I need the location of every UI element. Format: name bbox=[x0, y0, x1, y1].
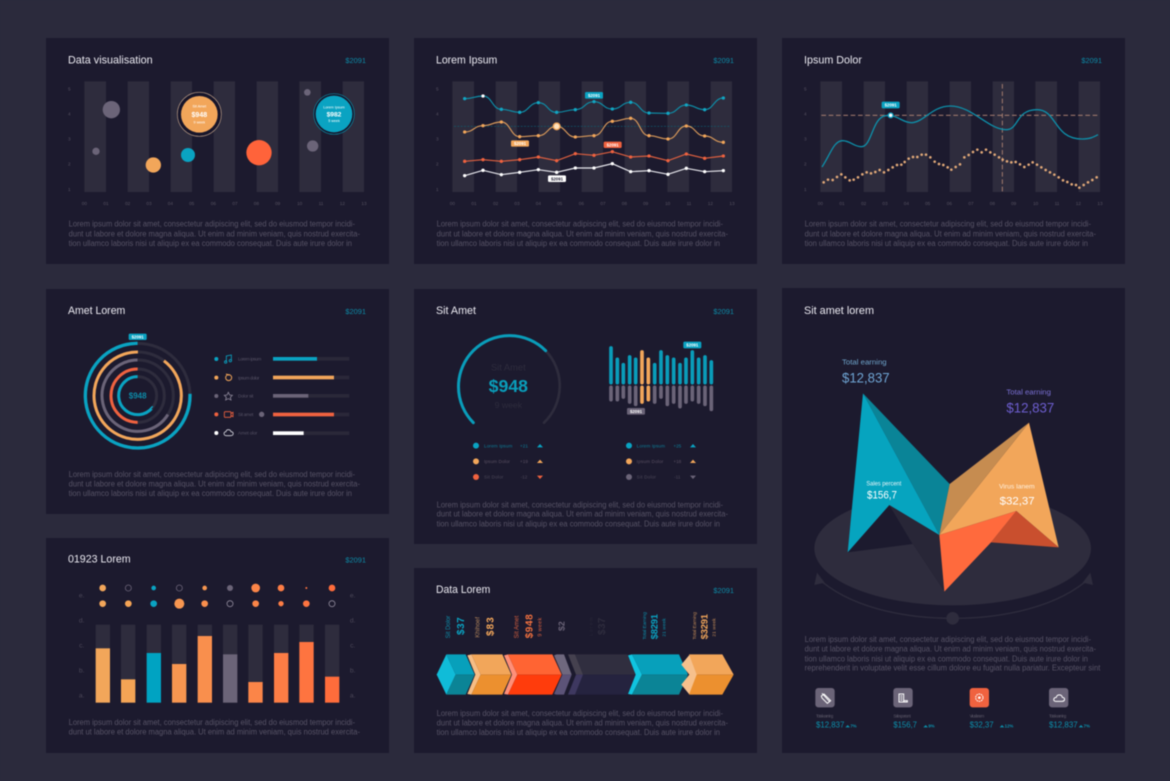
tag: orange: $2091 bbox=[514, 141, 527, 146]
legend left: Sit Dolor bbox=[484, 475, 504, 480]
line chart: 01 bbox=[471, 201, 477, 206]
panel: data lorem arrow chain bbox=[414, 568, 757, 753]
label: virus lanem: Virus lanem bbox=[999, 484, 1035, 491]
price label: $2091 bbox=[713, 586, 734, 595]
body text: dunt ut labore et dolore magna aliqua. Ut enim ad minim veniam, quis nostrud exercita- bbox=[437, 718, 728, 727]
legend right: Lorem Ipsum bbox=[637, 443, 665, 448]
bubble chart: 4 bbox=[68, 112, 71, 117]
line chart: 02 bbox=[493, 201, 499, 206]
body text bbox=[805, 220, 1096, 248]
bubble chart bbox=[68, 81, 367, 206]
price label: $2091 bbox=[345, 556, 366, 565]
stat: virus lanem: Virus lanem bbox=[970, 713, 985, 718]
bubble chart: 00 bbox=[82, 201, 87, 206]
body text: dunt ut labore et dolore magna aliqua. Ut enim ad minim veniam, quis nostrud exercita- bbox=[805, 645, 1096, 654]
stat: virus lanem: 12% bbox=[1005, 723, 1013, 728]
label: total earning left: Total earning bbox=[842, 358, 887, 367]
tag: gray: $2091 bbox=[630, 409, 643, 414]
radial chart bbox=[77, 335, 199, 457]
stat: total earning one: Total earning bbox=[816, 713, 834, 718]
legend left: +21 bbox=[520, 443, 528, 448]
body text: Lorem ipsum dolor sit amet, consectetur adipiscing elit, sed do eiusmod tempor incidi- bbox=[437, 220, 723, 229]
block: teal cube bbox=[437, 654, 475, 695]
block: red bbox=[504, 654, 562, 695]
stat: total earning one: $12,837 bbox=[816, 720, 845, 730]
axis letters: c. bbox=[79, 643, 84, 650]
3D chart bbox=[814, 358, 1093, 625]
curve and dotted chart: 00 bbox=[818, 201, 823, 206]
block: dark long bbox=[575, 654, 636, 695]
label: virus lanem bbox=[999, 484, 1035, 508]
axis letters: b. bbox=[350, 667, 356, 674]
label: sales percent: $156,7 bbox=[867, 490, 897, 502]
legend row: cloud: Amet olor bbox=[238, 431, 258, 436]
body text: Lorem ipsum dolor sit amet, consectetur adipiscing elit, sed do eiusmod tempor incidi- bbox=[69, 470, 355, 479]
body text: dunt ut labore et dolore magna aliqua. Ut enim ad minim veniam, quis nostrud exercita- bbox=[437, 510, 728, 519]
gauge bbox=[458, 336, 560, 423]
bubble chart: 06 bbox=[211, 201, 216, 206]
tag: teal: $2091 bbox=[132, 334, 144, 339]
heading: 01923 Lorem bbox=[68, 554, 131, 566]
legend right: Sit Dolor bbox=[637, 475, 656, 480]
label: total earning right bbox=[1006, 387, 1054, 416]
stat: total earning two bbox=[1049, 688, 1090, 730]
vertical labels: Sit Amet bbox=[515, 615, 521, 638]
legend row: star: Dolor sit bbox=[238, 394, 254, 399]
price label: $2091 bbox=[345, 307, 366, 316]
callout: teal bubble: 5 week bbox=[328, 119, 340, 123]
vertical labels: $3291 bbox=[699, 614, 709, 639]
body text: tion ullamco laboris nisi ut aliquip ex ea commodo consequat. Duis aute irure dolor in bbox=[69, 239, 352, 248]
callout: orange bubble: $948 bbox=[192, 112, 207, 119]
line chart: 00 bbox=[450, 201, 455, 206]
vertical labels: Lorem bbox=[588, 617, 593, 636]
bubble chart: 12 bbox=[340, 201, 345, 206]
footer content bbox=[805, 635, 1101, 730]
body text: dunt ut labore et dolore magna aliqua. Ut enim ad minim veniam, quis nostrud exercita- bbox=[69, 727, 360, 736]
bubble chart: 09 bbox=[275, 201, 281, 206]
legend right: +18 bbox=[673, 459, 682, 464]
line chart: 08 bbox=[622, 201, 627, 206]
tag: white: $2091 bbox=[551, 176, 564, 181]
vertical labels: $37 bbox=[597, 617, 608, 635]
price label: $2091 bbox=[1081, 56, 1102, 65]
tag: red bbox=[604, 142, 622, 148]
body text bbox=[69, 718, 360, 736]
tag: gray bbox=[627, 408, 645, 415]
line chart: 06 bbox=[579, 201, 584, 206]
curve and dotted chart: 2 bbox=[804, 162, 807, 167]
curve and dotted chart: 02 bbox=[861, 201, 867, 206]
vertical labels: Sit Dolor bbox=[446, 616, 452, 638]
vertical labels: $37 bbox=[456, 617, 467, 635]
label: virus lanem: $32,37 bbox=[1000, 496, 1035, 508]
legend bars bbox=[214, 355, 349, 436]
heading: Sit Amet bbox=[436, 305, 476, 317]
curve and dotted chart: 11 bbox=[1055, 201, 1060, 206]
line chart: 12 bbox=[708, 201, 713, 206]
vertical labels: $8291 bbox=[649, 614, 659, 639]
tag: teal: $2091 bbox=[588, 93, 601, 98]
tag: teal: $2091 bbox=[885, 103, 897, 108]
axis letters: d. bbox=[79, 617, 85, 624]
body text: tion ullamco laboris nisi ut aliquip ex ea commodo consequat. Duis aute irure dolor in bbox=[437, 519, 720, 528]
line chart: 1 bbox=[436, 187, 439, 192]
line chart: 5 bbox=[436, 87, 439, 92]
legend right bbox=[626, 443, 696, 480]
arrow chain bbox=[437, 654, 734, 695]
heading: Sit amet lorem bbox=[804, 305, 874, 317]
price label: $2091 bbox=[345, 56, 366, 65]
tag: teal bbox=[882, 102, 900, 108]
line chart: 2 bbox=[436, 162, 439, 167]
axis letters bbox=[79, 592, 356, 700]
body text: Lorem ipsum dolor sit amet, consectetur adipiscing elit, sed do eiusmod tempor incidi- bbox=[437, 500, 723, 509]
bubble chart: 02 bbox=[125, 201, 131, 206]
curve and dotted chart: 1 bbox=[804, 187, 807, 192]
dot matrix bbox=[99, 584, 335, 609]
teal peak bbox=[848, 393, 950, 552]
bubble chart: 07 bbox=[232, 201, 238, 206]
label: total earning left bbox=[842, 358, 890, 386]
legend row: swirl: Ipsum dolor bbox=[238, 375, 260, 380]
legend left bbox=[473, 443, 543, 480]
line chart: 05 bbox=[557, 201, 563, 206]
gauge: Sit Amet bbox=[491, 363, 526, 373]
block: orange end bbox=[681, 654, 734, 695]
tag: orange bbox=[511, 140, 529, 147]
heading: Amet Lorem bbox=[68, 305, 125, 317]
bubble chart: 04 bbox=[168, 201, 173, 206]
callout: orange bubble bbox=[177, 92, 221, 136]
price label: $2091 bbox=[713, 56, 734, 65]
body text: dunt ut labore et dolore magna aliqua. Ut enim ad minim veniam, quis nostrud exercita- bbox=[805, 229, 1096, 238]
legend right: Ipsum Dolor bbox=[637, 459, 664, 464]
body text bbox=[437, 709, 728, 737]
block: orange bbox=[467, 654, 511, 695]
curve and dotted chart: 3 bbox=[804, 137, 807, 142]
curve and dotted chart bbox=[804, 81, 1103, 206]
callout: teal bubble: Lorem Ipsum bbox=[323, 106, 345, 110]
vertical labels: $2 bbox=[556, 621, 566, 631]
vertical labels: Total Earning bbox=[642, 612, 648, 640]
bubble chart: 13 bbox=[361, 201, 367, 206]
orange peak bbox=[939, 423, 1059, 547]
price label: $2091 bbox=[713, 307, 734, 316]
legend row: music: Lorem ipsum bbox=[238, 357, 261, 362]
vertical labels: 21 week bbox=[662, 618, 667, 637]
legend row: video: Sit amet bbox=[238, 412, 254, 417]
curve and dotted chart: 05 bbox=[925, 201, 931, 206]
body text: Lorem ipsum dolor sit amet, consectetur adipiscing elit, sed do eiusmod tempor incidi- bbox=[437, 709, 723, 718]
bubble chart: 03 bbox=[146, 201, 152, 206]
line chart: 4 bbox=[436, 112, 439, 117]
axis letters: e. bbox=[79, 592, 85, 599]
block: gray small back bbox=[568, 654, 583, 695]
stat: total earning two: Total earning bbox=[1049, 713, 1067, 718]
stat: total earning two: $12,837 bbox=[1049, 720, 1078, 730]
stat: sales percent: Sales percent bbox=[893, 713, 911, 718]
bubble chart: 2 bbox=[68, 162, 71, 167]
curve and dotted chart: 08 bbox=[990, 201, 995, 206]
bubble chart: 1 bbox=[68, 187, 71, 192]
line chart: 13 bbox=[729, 201, 735, 206]
curve and dotted chart: 03 bbox=[882, 201, 888, 206]
line chart: 09 bbox=[643, 201, 649, 206]
heading: Lorem Ipsum bbox=[436, 55, 497, 67]
body text: tion ullamco laboris nisi ut aliquip ex ea commodo consequat. Duis aute irure dolor in bbox=[805, 239, 1088, 248]
axis letters: b. bbox=[79, 667, 85, 674]
tag: white bbox=[548, 175, 566, 182]
legend right: +25 bbox=[673, 443, 682, 448]
callout: orange bubble: Sit Amet bbox=[193, 104, 206, 108]
callout: teal bubble: $982 bbox=[327, 112, 342, 119]
axis letters: d. bbox=[350, 617, 356, 624]
shadow shapes bbox=[848, 505, 944, 592]
block: gray bbox=[554, 654, 572, 695]
bubble chart: 3 bbox=[68, 137, 71, 142]
line chart: 10 bbox=[665, 201, 671, 206]
vertical labels: Khihoef bbox=[475, 617, 481, 638]
panel: data visualisation bubble chart bbox=[46, 38, 389, 264]
label: total earning right: Total earning bbox=[1006, 387, 1051, 396]
curve and dotted chart: 07 bbox=[968, 201, 974, 206]
label: total earning left: $12,837 bbox=[842, 371, 890, 386]
heading: Data visualisation bbox=[68, 55, 153, 67]
stat: total earning one bbox=[815, 688, 857, 730]
body text: Lorem ipsum dolor sit amet, consectetur adipiscing elit, sed do eiusmod tempor incidi- bbox=[805, 635, 1091, 644]
body text: tion ullamco laboris nisi ut aliquip ex ea commodo consequat. Duis aute irure dolor in bbox=[437, 728, 720, 737]
curve and dotted chart: 01 bbox=[839, 201, 845, 206]
body text: reprehenderit in voluptate velit esse cillum dolore eu fugiat nulla pariatur. Excepteur sint bbox=[805, 664, 1101, 673]
stat: sales percent: $156,7 bbox=[893, 720, 917, 730]
body text: tion ullamco laboris nisi ut aliquip ex ea commodo consequat. Duis aute irure dolor in bbox=[437, 239, 720, 248]
legend left: +19 bbox=[520, 459, 528, 464]
line chart bbox=[436, 81, 735, 206]
curve and dotted chart: 13 bbox=[1097, 201, 1103, 206]
vertical labels: 21 week bbox=[712, 618, 717, 637]
panel: sit amet gauge and bars bbox=[414, 289, 757, 544]
vertical labels bbox=[446, 612, 717, 640]
tag: teal bbox=[683, 342, 701, 348]
callout: orange bubble: 9 week bbox=[194, 120, 205, 124]
label: sales percent bbox=[866, 480, 902, 502]
panel: lorem ipsum line chart bbox=[414, 38, 757, 264]
legend left: Ipsum Dolor bbox=[484, 459, 510, 464]
vertical labels: $948 bbox=[524, 614, 535, 638]
panel: ipsum dolor curve chart bbox=[782, 38, 1125, 264]
body text bbox=[69, 470, 360, 498]
stat: total earning one: 7% bbox=[850, 723, 857, 728]
body text: dunt ut labore et dolore magna aliqua. Ut enim ad minim veniam, quis nostrud exercita- bbox=[69, 480, 360, 489]
label: total earning right: $12,837 bbox=[1006, 401, 1054, 416]
heading: Ipsum Dolor bbox=[804, 55, 862, 67]
curve and dotted chart: 10 bbox=[1033, 201, 1039, 206]
vertical labels: Total Earning bbox=[692, 612, 698, 640]
axis letters: e. bbox=[350, 592, 356, 599]
curve and dotted chart: 4 bbox=[804, 112, 807, 117]
curve and dotted chart: 12 bbox=[1076, 201, 1081, 206]
legend left: Lorem Ipsum bbox=[484, 443, 512, 448]
curve and dotted chart: 04 bbox=[904, 201, 909, 206]
body text bbox=[69, 220, 360, 248]
line chart: 3 bbox=[436, 137, 439, 142]
body text: dunt ut labore et dolore magna aliqua. Ut enim ad minim veniam, quis nostrud exercita- bbox=[69, 229, 360, 238]
tag: teal: $2091 bbox=[686, 343, 699, 348]
body text: dunt ut labore et dolore magna aliqua. Ut enim ad minim veniam, quis nostrud exercita- bbox=[437, 229, 728, 238]
stat: total earning two: 7% bbox=[1084, 723, 1090, 728]
mirrored bar chart bbox=[611, 348, 711, 409]
stat: virus lanem: $32,37 bbox=[970, 720, 994, 730]
bubble chart: 05 bbox=[189, 201, 195, 206]
vertical labels: $83 bbox=[485, 617, 496, 636]
bubble chart: 10 bbox=[297, 201, 303, 206]
tag: teal bbox=[129, 334, 147, 340]
callout: teal bubble bbox=[314, 94, 354, 134]
line chart: 11 bbox=[687, 201, 692, 206]
axis letters: c. bbox=[350, 643, 355, 650]
curve and dotted chart: 5 bbox=[804, 87, 807, 92]
line chart: 07 bbox=[600, 201, 606, 206]
bubble chart: 5 bbox=[68, 87, 71, 92]
body text: Lorem ipsum dolor sit amet, consectetur adipiscing elit, sed do eiusmod tempor incidi- bbox=[69, 718, 355, 727]
radial chart: $948 bbox=[129, 392, 147, 401]
stat: virus lanem bbox=[970, 688, 1013, 730]
tag: red: $2091 bbox=[607, 142, 619, 147]
body text: Lorem ipsum dolor sit amet, consectetur adipiscing elit, sed do eiusmod tempor incidi- bbox=[805, 220, 1091, 229]
heading: Data Lorem bbox=[436, 584, 490, 596]
body text: tion ullamco laboris nisi ut aliquip ex ea commodo consequat. Duis aute irure dolor in bbox=[805, 654, 1088, 663]
bubble chart: 01 bbox=[103, 201, 109, 206]
gauge: 9 week bbox=[495, 400, 523, 410]
body text bbox=[437, 500, 728, 528]
stat: sales percent bbox=[893, 688, 935, 730]
gauge: $948 bbox=[489, 376, 528, 396]
block: teal long bbox=[628, 654, 688, 695]
tag: teal bbox=[585, 92, 603, 99]
bubble chart: 08 bbox=[254, 201, 259, 206]
curve and dotted chart: 06 bbox=[947, 201, 952, 206]
legend left: -12 bbox=[521, 475, 528, 480]
panel: amet lorem radial chart bbox=[46, 289, 389, 514]
line chart: 03 bbox=[514, 201, 520, 206]
stat: sales percent: 9% bbox=[928, 723, 935, 728]
body text: tion ullamco laboris nisi ut aliquip ex ea commodo consequat. Duis aute irure dolor in bbox=[69, 489, 352, 498]
panel: sit amet lorem 3D chart bbox=[782, 288, 1125, 753]
panel: 01923 lorem bar chart bbox=[46, 538, 389, 753]
axis letters: a. bbox=[79, 693, 85, 700]
body text: Lorem ipsum dolor sit amet, consectetur adipiscing elit, sed do eiusmod tempor incidi- bbox=[69, 220, 355, 229]
vertical labels: 9 week bbox=[537, 617, 543, 637]
legend right: -11 bbox=[674, 475, 681, 480]
body text bbox=[437, 220, 728, 248]
bubble chart: 11 bbox=[319, 201, 324, 206]
axis letters: a. bbox=[350, 693, 356, 700]
label: sales percent: Sales percent bbox=[866, 480, 902, 487]
line chart: 04 bbox=[536, 201, 541, 206]
platform bbox=[814, 491, 1093, 625]
red peak bbox=[939, 511, 1059, 592]
body text bbox=[805, 635, 1101, 673]
curve and dotted chart: 09 bbox=[1011, 201, 1017, 206]
bar chart bbox=[96, 625, 339, 703]
